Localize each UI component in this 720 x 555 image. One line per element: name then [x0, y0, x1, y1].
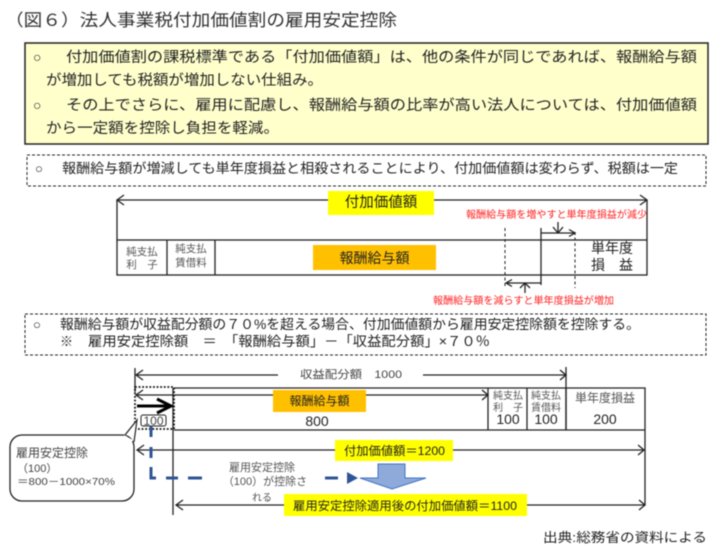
rent cell: 賃借料	[175, 256, 207, 269]
value added label	[335, 440, 453, 461]
callout: ＝800－1000×70%	[17, 476, 115, 488]
panel: summary	[25, 43, 708, 144]
panel: note 2: 報酬給与額が収益配分額の７０%を超える場合、付加価値額から雇用安定控除額を控除する。	[60, 317, 640, 332]
rent cell: 100	[534, 411, 558, 427]
panel: note 1: 報酬給与額が増減しても単年度損益と相殺されることにより、付加価値額は変わらず、税額は一定	[62, 160, 678, 176]
panel: summary: 付加価値割の課税標準である「付加価値額」は、他の条件が同じであれば、報酬給与額	[66, 49, 698, 66]
panel: note 2	[25, 314, 706, 355]
revenue distribution label: 収益配分額 1000	[300, 367, 402, 381]
rent cell: 純支払	[175, 242, 207, 255]
arrow: salary decrease	[506, 280, 541, 293]
single-year profit cell: 単年度損益	[575, 390, 635, 405]
red note: decrease: 報酬給与額を減らすと単年度損益が増加	[433, 294, 614, 307]
block arrow	[360, 464, 426, 489]
callout: 雇用安定控除	[16, 446, 88, 460]
single-year profit cell: 単年度	[591, 240, 633, 256]
rent cell	[531, 389, 561, 427]
interest cell	[126, 245, 158, 271]
panel: summary: ○	[33, 49, 41, 65]
value added arrow	[137, 445, 644, 455]
rent cell: 賃借料	[531, 401, 561, 414]
interest cell: 利 子	[126, 259, 158, 271]
deduction note: 雇用安定控除	[229, 460, 295, 474]
panel: note 1: ○	[35, 161, 43, 176]
deduction value box: 100	[143, 414, 164, 428]
value added arrow	[117, 195, 647, 205]
bar	[174, 388, 645, 505]
red note: increase: 報酬給与額を増やすと単年度損益が減少	[466, 208, 647, 221]
panel: note 2: 雇用安定控除額 ＝ 「報酬給与額」－「収益配分額」×７０％	[88, 334, 490, 349]
panel: note 1	[27, 155, 706, 186]
panel: summary: が増加しても税額が増加しない仕組み。	[46, 72, 323, 89]
rent cell: 純支払	[531, 389, 561, 402]
interest cell: 純支払	[126, 245, 158, 258]
callout	[10, 420, 137, 501]
value added label	[328, 191, 434, 215]
interest cell: 純支払	[493, 389, 523, 402]
rent cell	[175, 242, 207, 269]
adjusted value added label	[284, 494, 527, 516]
arrow: salary increase	[541, 222, 575, 236]
salary label: 報酬給与額	[340, 250, 410, 266]
source: 出典:総務省の資料による	[543, 530, 707, 545]
interest cell: 利 子	[493, 402, 523, 414]
chart: employment deduction diagram	[10, 367, 645, 516]
salary arrow	[136, 390, 488, 400]
dotted deduction box	[135, 387, 174, 429]
revenue distribution arrow	[136, 370, 566, 380]
adjusted value added label: 雇用安定控除適用後の付加価値額＝1100	[293, 498, 517, 513]
salary value: 800	[305, 413, 329, 429]
thick arrow	[137, 399, 171, 413]
interest cell: 100	[496, 411, 520, 427]
panel: note 2: ○	[33, 317, 41, 332]
single-year profit cell	[575, 390, 635, 427]
dashed blue arrow	[151, 426, 358, 484]
single-year profit cell: 損 益	[591, 257, 633, 273]
panel: summary: その上でさらに、雇用に配慮し、報酬給与額の比率が高い法人については、付加価値額	[66, 97, 698, 114]
salary label	[313, 245, 436, 270]
chart: value added diagram	[117, 191, 647, 307]
salary label: 報酬給与額	[289, 394, 350, 408]
adjusted value added arrow	[176, 500, 645, 510]
interest cell	[493, 389, 523, 427]
deduction note: れる	[252, 492, 272, 504]
single-year profit cell: 200	[593, 411, 617, 427]
panel: note 2: ※	[60, 334, 73, 349]
deduction note: （100）が控除さ	[223, 474, 307, 488]
deduction note	[223, 460, 307, 504]
callout: （100）	[17, 462, 57, 475]
single-year profit cell	[591, 240, 633, 273]
title: （図６）法人事業税付加価値割の雇用安定控除	[5, 11, 397, 30]
salary label	[273, 390, 366, 412]
value added label: 付加価値額	[345, 194, 418, 211]
panel: summary: から一定額を控除し負担を軽減。	[46, 120, 279, 137]
value added label: 付加価値額＝1200	[344, 443, 445, 458]
panel: summary: ○	[33, 97, 41, 113]
